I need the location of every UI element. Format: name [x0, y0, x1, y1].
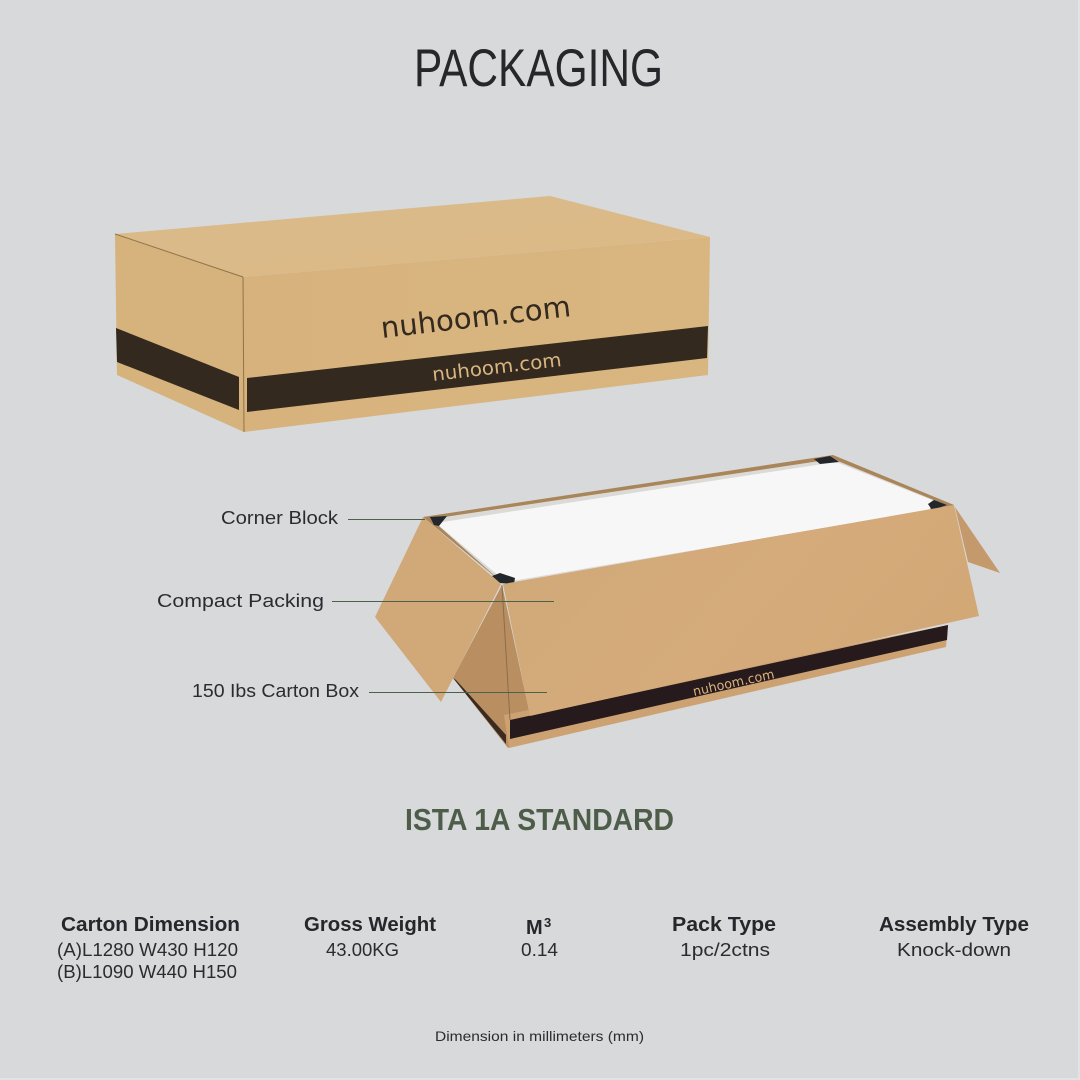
inner lining highlight — [431, 459, 946, 585]
spec: gross weight: Gross Weight — [304, 914, 436, 936]
body bottom — [504, 625, 948, 748]
back rim — [423, 455, 954, 585]
spec: assembly type: Assembly Type — [879, 914, 1029, 936]
spec: pack type: 1pc/2ctns — [680, 940, 770, 960]
box edges — [115, 234, 244, 432]
spec: assembly type — [879, 914, 1029, 960]
spec: carton dimension — [57, 914, 240, 982]
box left face — [115, 234, 244, 432]
front black band — [247, 326, 708, 412]
side of box — [453, 585, 530, 748]
compact packing line — [332, 600, 554, 602]
front flap — [503, 505, 979, 716]
spec: gross weight: 43.00KG — [326, 940, 399, 960]
standard heading: ISTA 1A STANDARD — [405, 802, 674, 837]
open carton box — [375, 455, 1000, 748]
front logo: nuhoom.com — [379, 289, 573, 345]
spec: pack type — [672, 914, 776, 960]
left flap — [375, 517, 501, 702]
corner blocks — [430, 456, 947, 584]
carton box label: 150 Ibs Carton Box — [192, 681, 359, 701]
right flap — [955, 507, 1000, 573]
spec: assembly type: Knock-down — [897, 940, 1011, 960]
spec: volume: M — [526, 917, 543, 939]
side dark band — [453, 678, 506, 744]
vertical fold — [502, 585, 510, 720]
compact packing label: Compact Packing — [157, 591, 324, 611]
spec: volume: 3 — [544, 915, 551, 930]
spec: carton dimension: (A)L1280 W430 H120 — [57, 940, 238, 960]
spec: carton dimension: (B)L1090 W440 H150 — [57, 962, 237, 982]
left black band — [116, 328, 239, 410]
band logo open box: nuhoom.com — [692, 667, 776, 700]
spec: pack type: Pack Type — [672, 914, 776, 936]
title: PACKAGING — [414, 39, 663, 98]
spec: carton dimension: Carton Dimension — [61, 914, 240, 936]
closed carton box — [115, 196, 710, 432]
spec: gross weight — [304, 914, 436, 960]
footnote: Dimension in millimeters (mm) — [435, 1028, 644, 1044]
band logo: nuhoom.com — [431, 349, 563, 386]
body black band — [510, 625, 948, 739]
corner block label: Corner Block — [221, 508, 339, 528]
white foam panel — [436, 462, 932, 582]
spec: volume — [521, 915, 558, 960]
corner block line — [348, 518, 425, 520]
carton box line — [369, 692, 547, 694]
spec: volume: 0.14 — [521, 940, 558, 960]
box top face — [115, 196, 710, 277]
box front face — [243, 237, 710, 432]
